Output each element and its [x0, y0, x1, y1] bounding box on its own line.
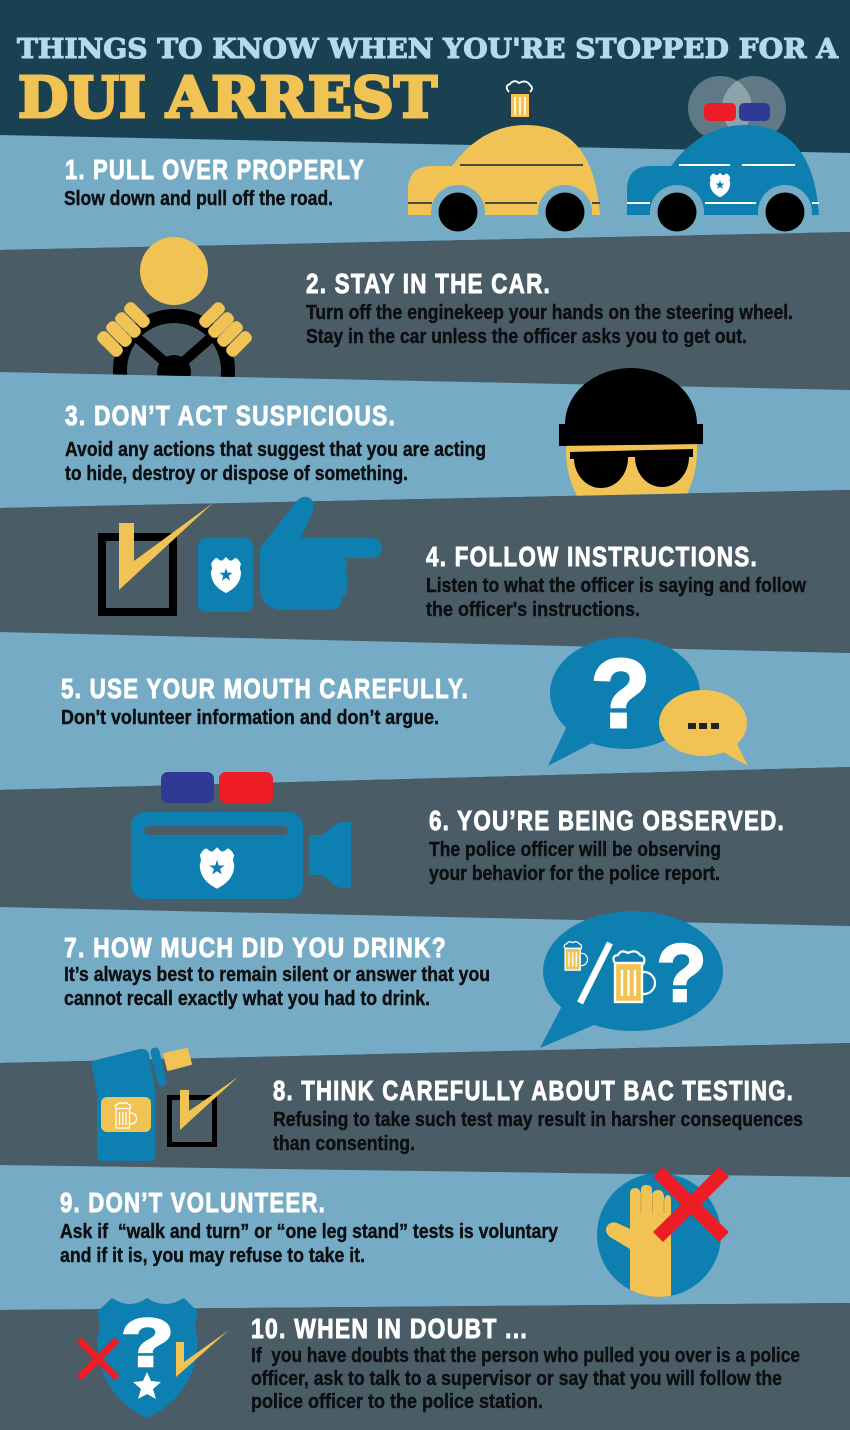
panel: step 4 band	[0, 490, 850, 653]
step 3 text: 3. DON’T ACT SUSPICIOUS.	[65, 400, 396, 431]
step 8 text	[273, 1075, 803, 1155]
panel: step 7 band	[0, 907, 850, 1063]
step 9 text	[60, 1187, 559, 1267]
icon: shield with question mark, cross and tick	[79, 1298, 229, 1418]
panel: step 1 band	[0, 135, 850, 250]
step 7 text: cannot recall exactly what you had to drink.	[64, 988, 430, 1010]
step 3 text: to hide, destroy or dispose of something.	[65, 463, 408, 485]
step 2 text: Turn off the enginekeep your hands on the steering wheel.	[306, 302, 793, 324]
step 6 text: your behavior for the police report.	[429, 863, 720, 885]
step 6 text	[429, 805, 785, 885]
icon: police lights with beams	[688, 76, 786, 140]
step 3 text: Avoid any actions that suggest that you are acting	[65, 439, 486, 461]
step 4 text: the officer's instructions.	[426, 599, 640, 621]
step 10 text: police officer to the police station.	[251, 1391, 543, 1413]
step 1 text	[64, 154, 365, 210]
step 4 text: 4. FOLLOW INSTRUCTIONS.	[426, 541, 758, 572]
icon: pointing hand	[260, 497, 382, 610]
icon: officer badge card	[198, 538, 253, 612]
icon: speech bubbles: ?	[591, 639, 650, 748]
step 10 text: officer, ask to talk to a supervisor or say that you will follow the	[251, 1368, 782, 1390]
step 9 text: and if it is, you may refuse to take it.	[60, 1245, 365, 1267]
step 5 text: 5. USE YOUR MOUTH CAREFULLY.	[61, 673, 469, 704]
step 7 text	[64, 932, 490, 1010]
panel: step 10 band	[0, 1303, 850, 1430]
icon: yellow car	[408, 125, 600, 239]
icon: suspect with beanie and sunglasses	[559, 368, 703, 500]
icon: breathalyzer device	[92, 1049, 191, 1161]
step 7 text: It’s always best to remain silent or answer that you	[64, 964, 490, 986]
step 9 text: Ask if “walk and turn” or “one leg stand” tests is voluntary	[60, 1221, 559, 1243]
step 9 text: 9. DON’T VOLUNTEER.	[60, 1187, 326, 1218]
step 6 text: The police officer will be observing	[429, 839, 721, 861]
step 1 text: 1. PULL OVER PROPERLY	[65, 154, 365, 185]
title	[17, 33, 839, 131]
step 2 text	[306, 268, 793, 348]
icon: speech bubble with beers and question mark: ?	[656, 928, 707, 1019]
step 1 text: Slow down and pull off the road.	[64, 188, 333, 210]
icon: shield with question mark, cross and tick: ?	[121, 1304, 174, 1381]
step 4 text	[426, 541, 806, 621]
icon: checkbox with tick	[102, 503, 213, 612]
step 2 text: 2. STAY IN THE CAR.	[306, 268, 551, 299]
step 10 text: 10. WHEN IN DOUBT ...	[251, 1313, 528, 1344]
panel: step 6 band	[0, 767, 850, 926]
step 8 text: than consenting.	[273, 1133, 415, 1155]
icon: raised hand refused	[597, 1172, 724, 1300]
icon: driver at steering wheel	[97, 237, 252, 377]
icon: police car	[627, 125, 819, 239]
panel: step 9 band	[0, 1165, 850, 1310]
icon: speech bubble with beers and question mark	[540, 911, 723, 1048]
title: DUI ARREST	[18, 65, 437, 131]
icon: police video camera	[131, 772, 351, 899]
step 5 text: Don't volunteer information and don’t argue.	[61, 707, 439, 729]
step 5 text	[61, 673, 469, 729]
step 4 text: Listen to what the officer is saying and follow	[426, 575, 806, 597]
step 7 text: 7. HOW MUCH DID YOU DRINK?	[64, 932, 447, 963]
icon: beer mug on car	[507, 81, 541, 118]
panel: step 5 band	[0, 632, 850, 790]
step 2 text: Stay in the car unless the officer asks you to get out.	[306, 326, 747, 348]
panel: step 8 band	[0, 1043, 850, 1177]
panel: step 2 band	[0, 232, 850, 390]
icon: small checkbox with tick	[170, 1077, 238, 1144]
step 10 text	[251, 1313, 800, 1413]
icon: speech bubbles	[548, 637, 748, 766]
title: THINGS TO KNOW WHEN YOU'RE STOPPED FOR A	[17, 33, 839, 65]
step 3 text	[65, 400, 486, 485]
panel: step 3 band	[0, 372, 850, 508]
